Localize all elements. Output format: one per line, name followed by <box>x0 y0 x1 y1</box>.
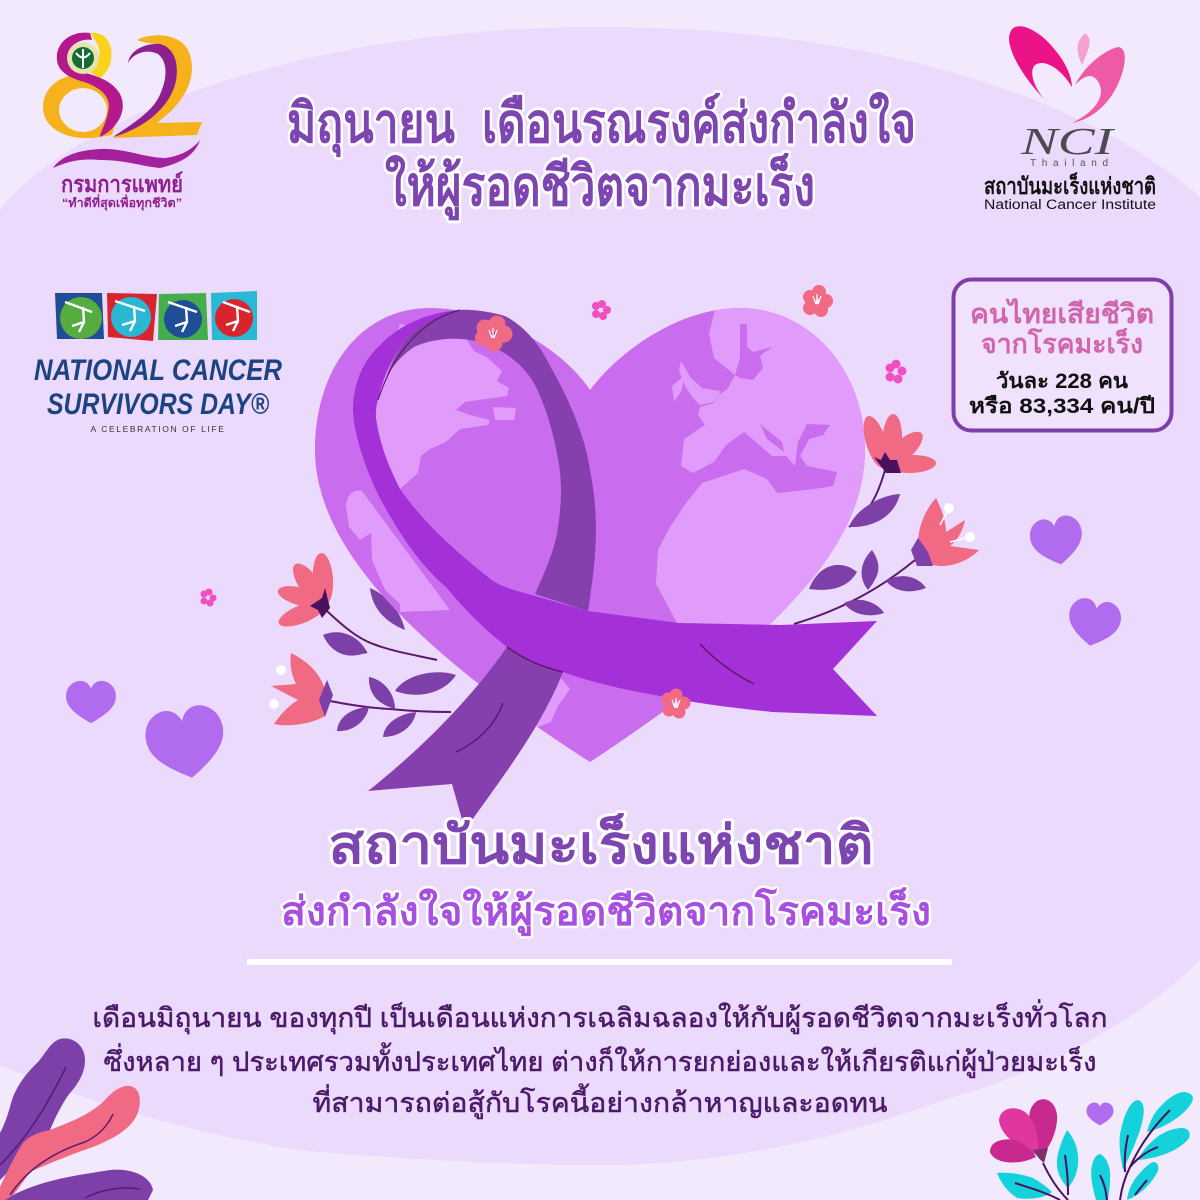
small flowers <box>200 285 906 718</box>
body text: เดือนมิถุนายน ของทุกปี เป็นเดือนแห่งการเฉลิมฉลองให้กับผู้รอดชีวิตจากมะเร็งทั่วโลก <box>92 999 1108 1035</box>
heart: bottom small <box>1086 1103 1114 1125</box>
tile icons <box>55 291 257 341</box>
title: เดือนรณรงค์ส่งกำลังใจ <box>482 91 916 154</box>
callout figures: วันละ 228 คน <box>996 370 1129 393</box>
left lobe land <box>346 491 450 612</box>
Americas <box>367 324 509 489</box>
subheading: ส่งกำลังใจให้ผู้รอดชีวิตจากโรคมะเร็ง <box>281 886 931 936</box>
body text <box>92 999 1108 1119</box>
body text: ซึ่งหลาย ๆ ประเทศรวมทั้งประเทศไทย ต่างก็ให้การยกย่องและให้เกียรติแก่ผู้ป่วยมะเร็ง <box>104 1042 1096 1078</box>
callout heading: จากโรคมะเร็ง <box>981 326 1143 359</box>
department slogan: “ทำดีที่สุดเพื่อทุกชีวิต” <box>62 194 182 211</box>
left stems and leaves <box>323 588 456 737</box>
NCSD line 1: NATIONAL CANCER <box>34 354 282 387</box>
heart: left large <box>141 702 231 784</box>
department name: กรมการแพทย์ <box>61 171 183 197</box>
left flowers <box>269 552 335 725</box>
decorative hearts <box>66 513 1124 1125</box>
heart <box>315 308 865 762</box>
title <box>287 91 916 221</box>
heart: right lower <box>1064 596 1124 650</box>
Thailand: Thailand <box>1030 158 1108 169</box>
logo: National Cancer Institute <box>984 26 1156 212</box>
heart: right upper <box>1027 513 1087 569</box>
NCI script: NCI <box>1020 121 1116 163</box>
ribbon dark loop <box>386 310 596 611</box>
title: มิถุนายน <box>287 92 455 158</box>
leaves: bottom left <box>0 1038 153 1200</box>
callout: Thai cancer deaths <box>954 280 1172 430</box>
Institute English name: National Cancer Institute <box>984 197 1156 212</box>
logo: 82 years Department of Medical Services <box>43 33 202 211</box>
subheading: สถาบันมะเร็งแห่งชาติ <box>328 813 874 875</box>
plant: bottom right <box>990 1092 1193 1200</box>
right flowers <box>859 413 979 566</box>
Europe and Africa <box>656 308 865 625</box>
callout figures: หรือ 83,334 คน/ปี <box>969 394 1155 418</box>
peninsula cutout <box>735 324 772 380</box>
NCSD tagline: A CELEBRATION OF LIFE <box>90 424 226 434</box>
callout figures <box>969 370 1155 418</box>
subheading <box>281 813 931 936</box>
right stems and leaves <box>794 470 926 624</box>
body text: ที่สามารถต่อสู้กับโรคนี้อย่างกล้าหาญและอดทน <box>312 1083 888 1119</box>
divider <box>247 959 952 965</box>
NCSD line 2: SURVIVORS DAY® <box>47 388 270 421</box>
title: ให้ผู้รอดชีวิตจากมะเร็ง <box>385 153 815 221</box>
ribbon fold lines <box>456 644 754 752</box>
ribbon tail <box>368 647 563 830</box>
callout heading <box>970 298 1154 359</box>
continents <box>310 300 900 728</box>
heart: left small <box>66 681 116 723</box>
illustration: heart globe and ribbon <box>200 285 979 830</box>
callout heading: คนไทยเสียชีวิต <box>970 298 1154 329</box>
circular emblem <box>67 42 99 74</box>
logo: National Cancer Survivors Day <box>34 291 282 434</box>
Institute Thai name: สถาบันมะเร็งแห่งชาติ <box>984 171 1156 199</box>
ribbon main band <box>353 310 877 716</box>
